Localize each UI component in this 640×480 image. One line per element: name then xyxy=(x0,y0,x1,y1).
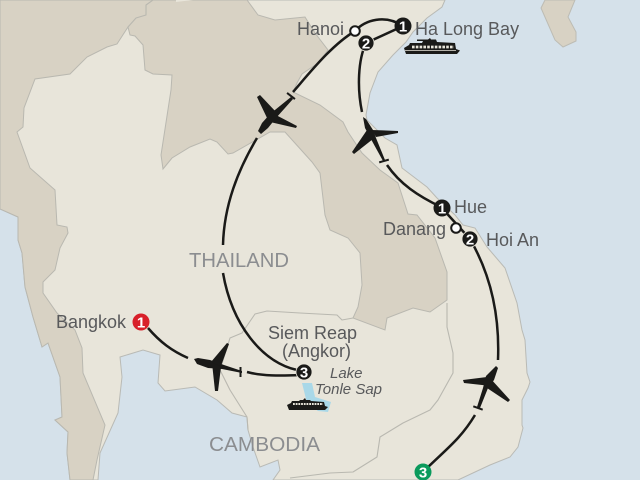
stop: Ha Long Bay marker: 1 xyxy=(399,18,407,36)
stop: Hoi An marker: 2 xyxy=(466,232,474,248)
country border: Thailand and Cambodia xyxy=(220,311,353,430)
stop: Siem Reap marker xyxy=(296,364,312,382)
route: Hoi An southwards xyxy=(423,239,498,472)
plane: southern Vietnam xyxy=(463,366,510,411)
country label: Thailand: THAILAND xyxy=(189,250,289,272)
stop: southern Vietnam marker xyxy=(414,464,432,480)
plane: Laos xyxy=(257,92,297,134)
ship windows xyxy=(293,403,323,405)
stop: Hue marker: 1 xyxy=(438,200,446,218)
country border: Myanmar and China xyxy=(128,0,153,27)
ship hull and decks xyxy=(287,398,328,410)
ship windows xyxy=(412,46,454,48)
label: Hoi An: Hoi An xyxy=(486,230,539,250)
route: Hoi An to Hue xyxy=(387,165,470,239)
label: Lake: Lake xyxy=(330,365,363,382)
label: Bangkok: Bangkok xyxy=(56,312,127,332)
stop: Hanoi marker xyxy=(350,26,360,36)
stop: Hue marker xyxy=(434,200,450,218)
stop: Ha Long second marker: 2 xyxy=(362,36,370,52)
stop: Ha Long Bay marker xyxy=(394,18,412,36)
country label: Cambodia: CAMBODIA xyxy=(209,434,321,456)
label: Danang: Danang xyxy=(383,219,446,239)
label: Hanoi: Hanoi xyxy=(297,19,344,39)
label: Siem Reap: Siem Reap xyxy=(268,323,357,343)
plane: Bangkok to Siem Reap xyxy=(194,343,242,391)
stop: Bangkok marker xyxy=(132,314,150,332)
stop: Bangkok marker: 1 xyxy=(137,314,145,332)
stop: Danang marker xyxy=(451,223,461,233)
dark land: Myanmar, China, Laos xyxy=(0,0,447,480)
route: Bangkok to Siem Reap xyxy=(148,328,300,376)
ship: Ha Long Bay cruise xyxy=(404,38,460,54)
land sliver at top edge xyxy=(176,0,193,2)
label: Tonle Sap: Tonle Sap xyxy=(315,381,382,398)
label: Hue: Hue xyxy=(454,197,487,217)
label: Ha Long Bay: Ha Long Bay xyxy=(415,19,519,39)
ship hull and decks xyxy=(404,38,460,54)
plane: central Vietnam xyxy=(352,117,398,163)
route: Hanoi to Ha Long Bay and back xyxy=(355,19,403,112)
ship: Lake Tonle Sap cruise xyxy=(287,398,328,410)
lake: Tonle Sap xyxy=(302,383,331,412)
flight routes xyxy=(148,19,498,472)
ship hull stripe xyxy=(405,50,456,52)
stop: Ha Long second marker xyxy=(358,35,374,52)
island: Hainan xyxy=(541,0,576,47)
label: Angkor: (Angkor) xyxy=(282,341,351,361)
country border: Cambodia and Vietnam xyxy=(290,303,453,478)
stop: Hoi An marker xyxy=(462,231,478,248)
route: Siem Reap to Hanoi xyxy=(223,31,355,370)
stop: Siem Reap marker: 3 xyxy=(300,364,308,382)
